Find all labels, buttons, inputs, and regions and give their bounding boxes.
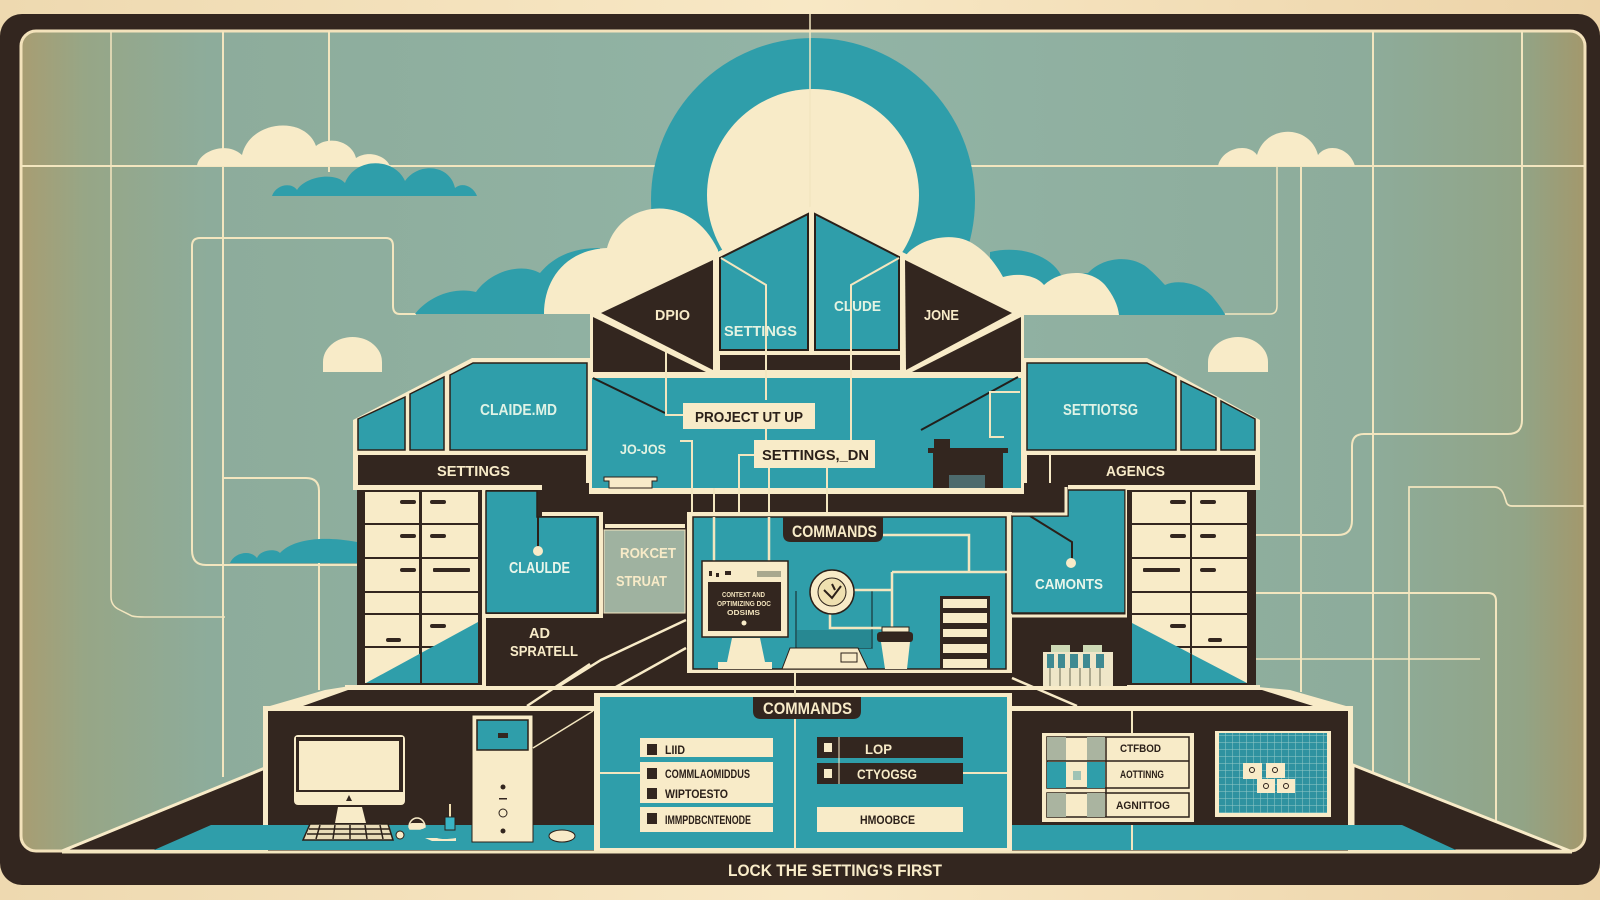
label: camonts: CAMONTS bbox=[1035, 576, 1103, 593]
diagonal support beams bbox=[527, 620, 686, 706]
dark building mass bbox=[357, 452, 1256, 700]
ad label panel: SPRATELL bbox=[510, 643, 578, 660]
cream cloud top right bbox=[1218, 132, 1355, 166]
icon: computer monitor: CONTEXT AND bbox=[722, 592, 765, 599]
button: memorable bbox=[817, 807, 963, 832]
ad label panel: AD bbox=[529, 625, 550, 642]
floor teal left bbox=[154, 825, 594, 850]
right cabinet bbox=[1127, 490, 1256, 685]
label: claude: CLAULDE bbox=[509, 560, 570, 577]
project structure panel: ROKCET bbox=[620, 545, 676, 562]
central project room bbox=[589, 258, 1024, 561]
label: settings.json: SETTINGS,_DN bbox=[762, 447, 869, 464]
cream trim under right cabinet bbox=[1127, 685, 1260, 689]
cream trim around left cabinet bbox=[345, 489, 601, 687]
floor line bbox=[62, 850, 1572, 854]
roof label: JONE: JONE bbox=[924, 307, 959, 324]
list: right commands: CTYOGSG bbox=[857, 766, 917, 782]
roof label: settings: SETTINGS bbox=[724, 323, 797, 340]
sun with teal ring bbox=[651, 38, 975, 362]
icon: coffee cup bbox=[877, 627, 913, 669]
cream cloud top left bbox=[197, 125, 390, 166]
icon: computer monitor: ODSIMS bbox=[727, 610, 760, 617]
list: right commands bbox=[817, 737, 963, 784]
dark notch under the right band bbox=[1022, 483, 1068, 515]
lower shelf roof bbox=[263, 664, 1353, 714]
small dome cloud left bbox=[323, 337, 382, 372]
icon: cup and pen on desk bbox=[396, 804, 456, 841]
list: left commands: WIPTOESTO bbox=[665, 789, 728, 801]
commands panel bbox=[594, 673, 1012, 852]
teal cloud top left bbox=[272, 163, 477, 196]
small dome cloud right bbox=[1208, 337, 1268, 372]
icon: miniature buildings bbox=[1043, 645, 1113, 690]
teal cloud low left bbox=[230, 539, 357, 563]
commands room bbox=[687, 512, 1012, 673]
settings table bbox=[1042, 733, 1194, 822]
label: project set up bbox=[683, 403, 815, 429]
icon: bench bbox=[604, 477, 657, 488]
tag: commands: COMMANDS bbox=[792, 522, 877, 541]
list: left commands bbox=[640, 738, 773, 832]
camonts panel bbox=[1012, 487, 1127, 616]
project structure panel bbox=[604, 524, 685, 613]
connector from tower to wall bbox=[533, 711, 593, 748]
settings table: AGNITTOG bbox=[1116, 800, 1170, 812]
settings table: AOTTINNG bbox=[1120, 769, 1164, 781]
icon: mouse bbox=[549, 830, 575, 842]
roof bbox=[590, 206, 1024, 378]
label: settings right: SETTIOTSG bbox=[1063, 402, 1138, 419]
icon: computer monitor: OPTIMIZING DOC bbox=[717, 601, 771, 608]
icon: desktop computer bbox=[294, 735, 405, 823]
cream cloud behind the roof, right bbox=[906, 237, 1119, 315]
floor ramp left bbox=[62, 768, 265, 851]
label: settings band: SETTINGS bbox=[437, 463, 510, 480]
teal cloud behind the roof, right bbox=[990, 250, 1225, 315]
label: settings.json bbox=[754, 440, 875, 468]
list: left commands: COMMLAOMIDDUS bbox=[665, 769, 750, 781]
icon: printer bbox=[782, 648, 868, 669]
button: memorable: HMOOBCE bbox=[860, 815, 915, 827]
house cross-section building bbox=[62, 206, 1570, 852]
floor teal right bbox=[1012, 825, 1456, 850]
icon: wall clock bbox=[810, 570, 854, 614]
icon: keyboard bbox=[303, 824, 393, 840]
floor ramp right bbox=[1353, 765, 1570, 851]
roof label: claude: CLUDE bbox=[834, 298, 881, 315]
footer caption: LOCK THE SETTING'S FIRST bbox=[728, 861, 943, 880]
bottom right room bbox=[1012, 706, 1456, 852]
label: project set up: PROJECT UT UP bbox=[695, 409, 803, 426]
icon: desk bbox=[928, 439, 1008, 488]
tag: commands: COMMANDS bbox=[763, 699, 852, 718]
icon: computer monitor bbox=[702, 561, 788, 669]
label: CLAUDE.MD: CLAIDE.MD bbox=[480, 402, 557, 419]
icon: glass box bbox=[796, 591, 872, 648]
list: left commands: IMMPDBCNTENODE bbox=[665, 815, 751, 827]
icon: computer tower bbox=[472, 715, 533, 842]
label: jo-jos: JO-JOS bbox=[620, 441, 666, 457]
bottom left room bbox=[154, 706, 596, 852]
list: left commands: LIID bbox=[665, 745, 685, 757]
teal cloud behind the roof, left bbox=[415, 248, 600, 314]
label: agents band: AGENCS bbox=[1106, 463, 1165, 480]
settings table: CTFBOD bbox=[1120, 743, 1161, 755]
icon: stack of books bbox=[940, 596, 990, 669]
ad label panel bbox=[510, 625, 578, 660]
blueprint panel bbox=[1215, 731, 1331, 817]
upper left wing bbox=[353, 358, 593, 490]
upper right wing bbox=[1021, 358, 1260, 490]
left cabinet bbox=[358, 490, 481, 685]
project structure panel: STRUAT bbox=[616, 573, 667, 590]
vertical guide line through the sun bbox=[809, 14, 811, 212]
dark notch under the left band bbox=[542, 483, 592, 515]
tag: commands bbox=[783, 517, 883, 542]
roof label: DPIO: DPIO bbox=[655, 307, 690, 324]
claude panel bbox=[486, 491, 597, 613]
list: right commands: LOP bbox=[865, 741, 892, 757]
cream cloud behind the roof, left bbox=[544, 208, 720, 314]
